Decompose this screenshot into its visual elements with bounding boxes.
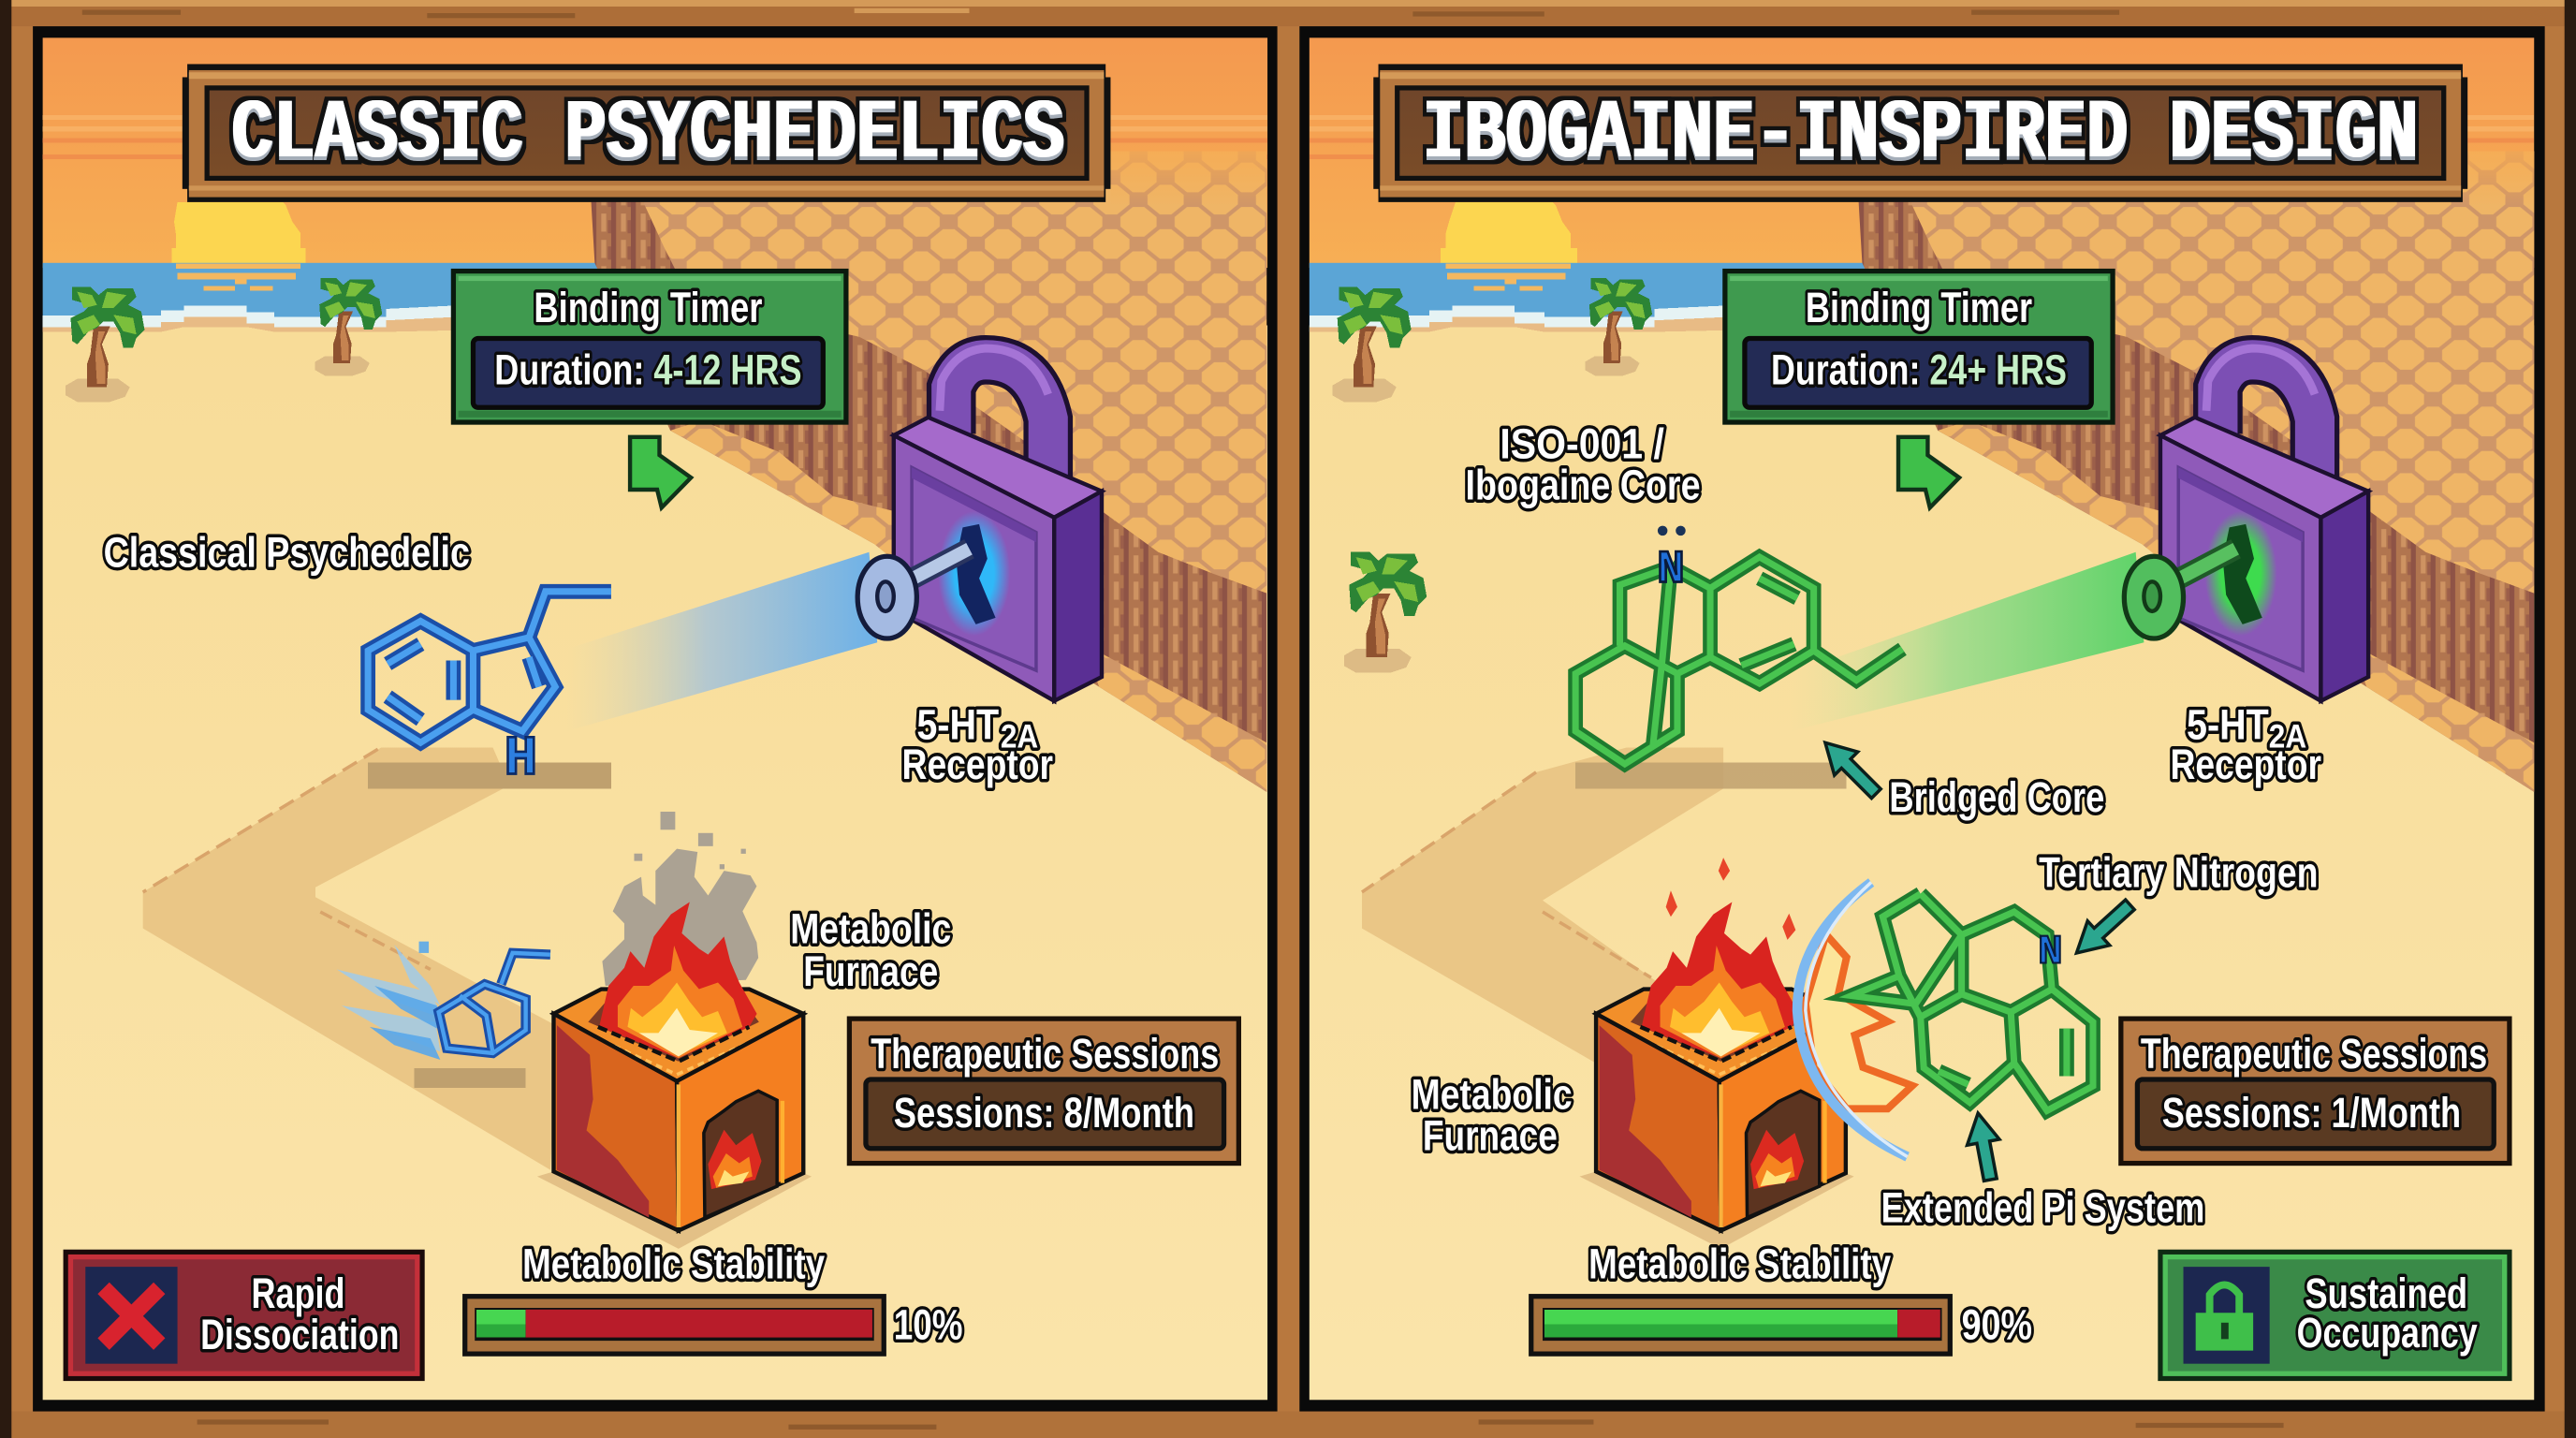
icon: green lock (2184, 1267, 2270, 1364)
meter red (1897, 1310, 1940, 1338)
icon: palm tree (1332, 286, 1412, 402)
cliff (588, 151, 1266, 792)
sessions value: Sessions: 1/Month (2162, 1089, 2461, 1137)
key (2124, 549, 2236, 638)
duration readout (1745, 339, 2091, 407)
panel border (1299, 26, 2545, 1412)
wet sand (1310, 317, 1871, 332)
badge text: Sustained (2305, 1269, 2467, 1317)
badge text: Occupancy (2297, 1309, 2478, 1357)
panel border (33, 26, 1278, 1412)
molecule: iso-001 (1575, 526, 1902, 764)
atom label: nitrogen: N (1657, 543, 1685, 595)
panel: ibogaine-inspired design (1299, 26, 2545, 1412)
label: 5-HT2A receptor (2170, 701, 2321, 788)
arrow: timer to lock (1898, 437, 1959, 507)
arrow: extended pi system (1968, 1113, 1999, 1181)
badge text (200, 1269, 399, 1358)
background: sand (1310, 325, 2534, 1400)
label: iso-001 / ibogaine core: Ibogaine Core (1466, 462, 1701, 509)
sand path (143, 748, 559, 1170)
therapeutic sessions box (849, 1019, 1238, 1164)
icon: setting sun (1441, 202, 1577, 263)
label: 5-HT2A receptor: Receptor (2170, 741, 2321, 788)
label: 5-HT2A receptor: Receptor (902, 741, 1053, 788)
label: 5-HT2A receptor: 2A (2269, 719, 2306, 756)
panel: classic psychedelics (33, 26, 1278, 1412)
flame deflected by shield (1806, 934, 1912, 1108)
icon: red x (85, 1267, 178, 1364)
background: sand (43, 325, 1267, 1400)
binding timer heading: Binding Timer (1806, 284, 2032, 331)
label: metabolic furnace: Furnace (1423, 1112, 1558, 1160)
key (857, 549, 970, 638)
label: bridged core: Bridged Core (1889, 773, 2104, 821)
duration value: Duration: 24+ HRS (1771, 346, 2067, 394)
meter red (526, 1310, 872, 1338)
icon: palm tree (315, 278, 382, 375)
binding timer heading: Binding Timer (534, 284, 763, 331)
sessions value: Sessions: 8/Month (894, 1089, 1194, 1137)
icon: palm tree (1585, 278, 1652, 375)
sessions heading: Therapeutic Sessions (871, 1030, 1219, 1078)
badge text: Dissociation (200, 1311, 399, 1358)
sun reflection (176, 264, 300, 291)
label: 5-HT2A receptor: 5-HT (2187, 701, 2269, 749)
label: 5-HT2A receptor (902, 701, 1053, 788)
meter label: Metabolic Stability (522, 1240, 826, 1287)
icon: padlock receptor (857, 348, 1102, 701)
smoke (602, 812, 758, 986)
label: classical psychedelic: Classical Psychedelic (104, 528, 470, 576)
label: 5-HT2A receptor: 2A (1001, 719, 1038, 756)
badge text (2297, 1269, 2478, 1357)
wet sand (43, 317, 601, 332)
background: sky (1310, 37, 2534, 268)
background: sky (43, 37, 1267, 268)
metabolic stability meter (465, 1240, 962, 1354)
title plaque (183, 64, 1110, 202)
molecule: dissolving (337, 942, 550, 1088)
keyhole (938, 511, 1010, 636)
status badge: rapid dissociation (66, 1252, 422, 1378)
label: metabolic furnace: Furnace (803, 947, 938, 995)
meter green (1544, 1310, 1897, 1338)
meter track (1531, 1297, 1950, 1354)
label: metabolic furnace: Metabolic (1412, 1071, 1573, 1119)
sessions heading: Therapeutic Sessions (2141, 1030, 2487, 1078)
background: sunset bands (1310, 115, 2534, 159)
molecule shadow (1575, 762, 1847, 788)
lone pair (1658, 526, 1686, 536)
arrow: tertiary nitrogen (2076, 900, 2134, 953)
shield arc (1797, 882, 1908, 1157)
atom label: H (504, 727, 537, 791)
icon: palm tree (1344, 552, 1427, 673)
keyhole (2204, 511, 2277, 636)
label: iso-001 / ibogaine core: ISO-001 / (1500, 420, 1664, 468)
metabolic stability meter (1531, 1240, 2032, 1354)
label: 5-HT2A receptor: 5-HT (916, 701, 999, 749)
sand path (1362, 748, 1723, 1071)
shoreline foam (1310, 305, 1871, 327)
icon: setting sun (171, 202, 305, 263)
meter label: Metabolic Stability (1588, 1240, 1892, 1287)
label: tertiary nitrogen: Tertiary Nitrogen (2039, 849, 2318, 897)
sun reflection (1445, 264, 1571, 291)
binding beam (567, 552, 877, 731)
meter green (476, 1310, 526, 1338)
title plaque (1373, 64, 2467, 202)
atom label: nitrogen: N (2038, 929, 2063, 976)
binding timer box (1725, 271, 2113, 422)
background: sea (43, 263, 601, 332)
duration value: Duration: 4-12 HRS (494, 346, 801, 394)
embers (1666, 858, 1795, 940)
duration readout (473, 339, 823, 407)
background: sunset bands (43, 115, 1267, 159)
shoreline foam (43, 305, 601, 327)
arrow: timer to lock (630, 437, 691, 507)
arrow: bridged core (1825, 742, 1881, 799)
label: iso-001 / ibogaine core (1466, 420, 1701, 509)
molecule: extended pi scaffold (1852, 894, 2093, 1110)
background: sea (1310, 263, 1871, 332)
meter value: 90% (1962, 1300, 2032, 1348)
binding timer box (453, 271, 846, 422)
label: extended pi system: Extended Pi System (1881, 1184, 2204, 1232)
status badge: sustained occupancy (2160, 1252, 2510, 1378)
label: metabolic furnace: Metabolic (790, 904, 951, 952)
label: metabolic furnace (1412, 1071, 1573, 1160)
badge text: Rapid (252, 1269, 345, 1317)
icon: metabolic furnace (1580, 902, 1854, 1249)
meter value: 10% (894, 1300, 962, 1348)
label: metabolic furnace (790, 904, 951, 995)
meter track (465, 1297, 884, 1354)
binding beam (1791, 552, 2144, 731)
icon: metabolic furnace (537, 902, 812, 1249)
molecule: classical psychedelic (368, 592, 611, 791)
title text: CLASSIC PSYCHEDELICS (231, 87, 1064, 185)
therapeutic sessions box (2121, 1019, 2510, 1164)
icon: palm tree (66, 286, 144, 402)
icon: padlock receptor (2124, 348, 2368, 701)
cliff (1855, 151, 2534, 792)
molecule shadow (368, 762, 611, 788)
